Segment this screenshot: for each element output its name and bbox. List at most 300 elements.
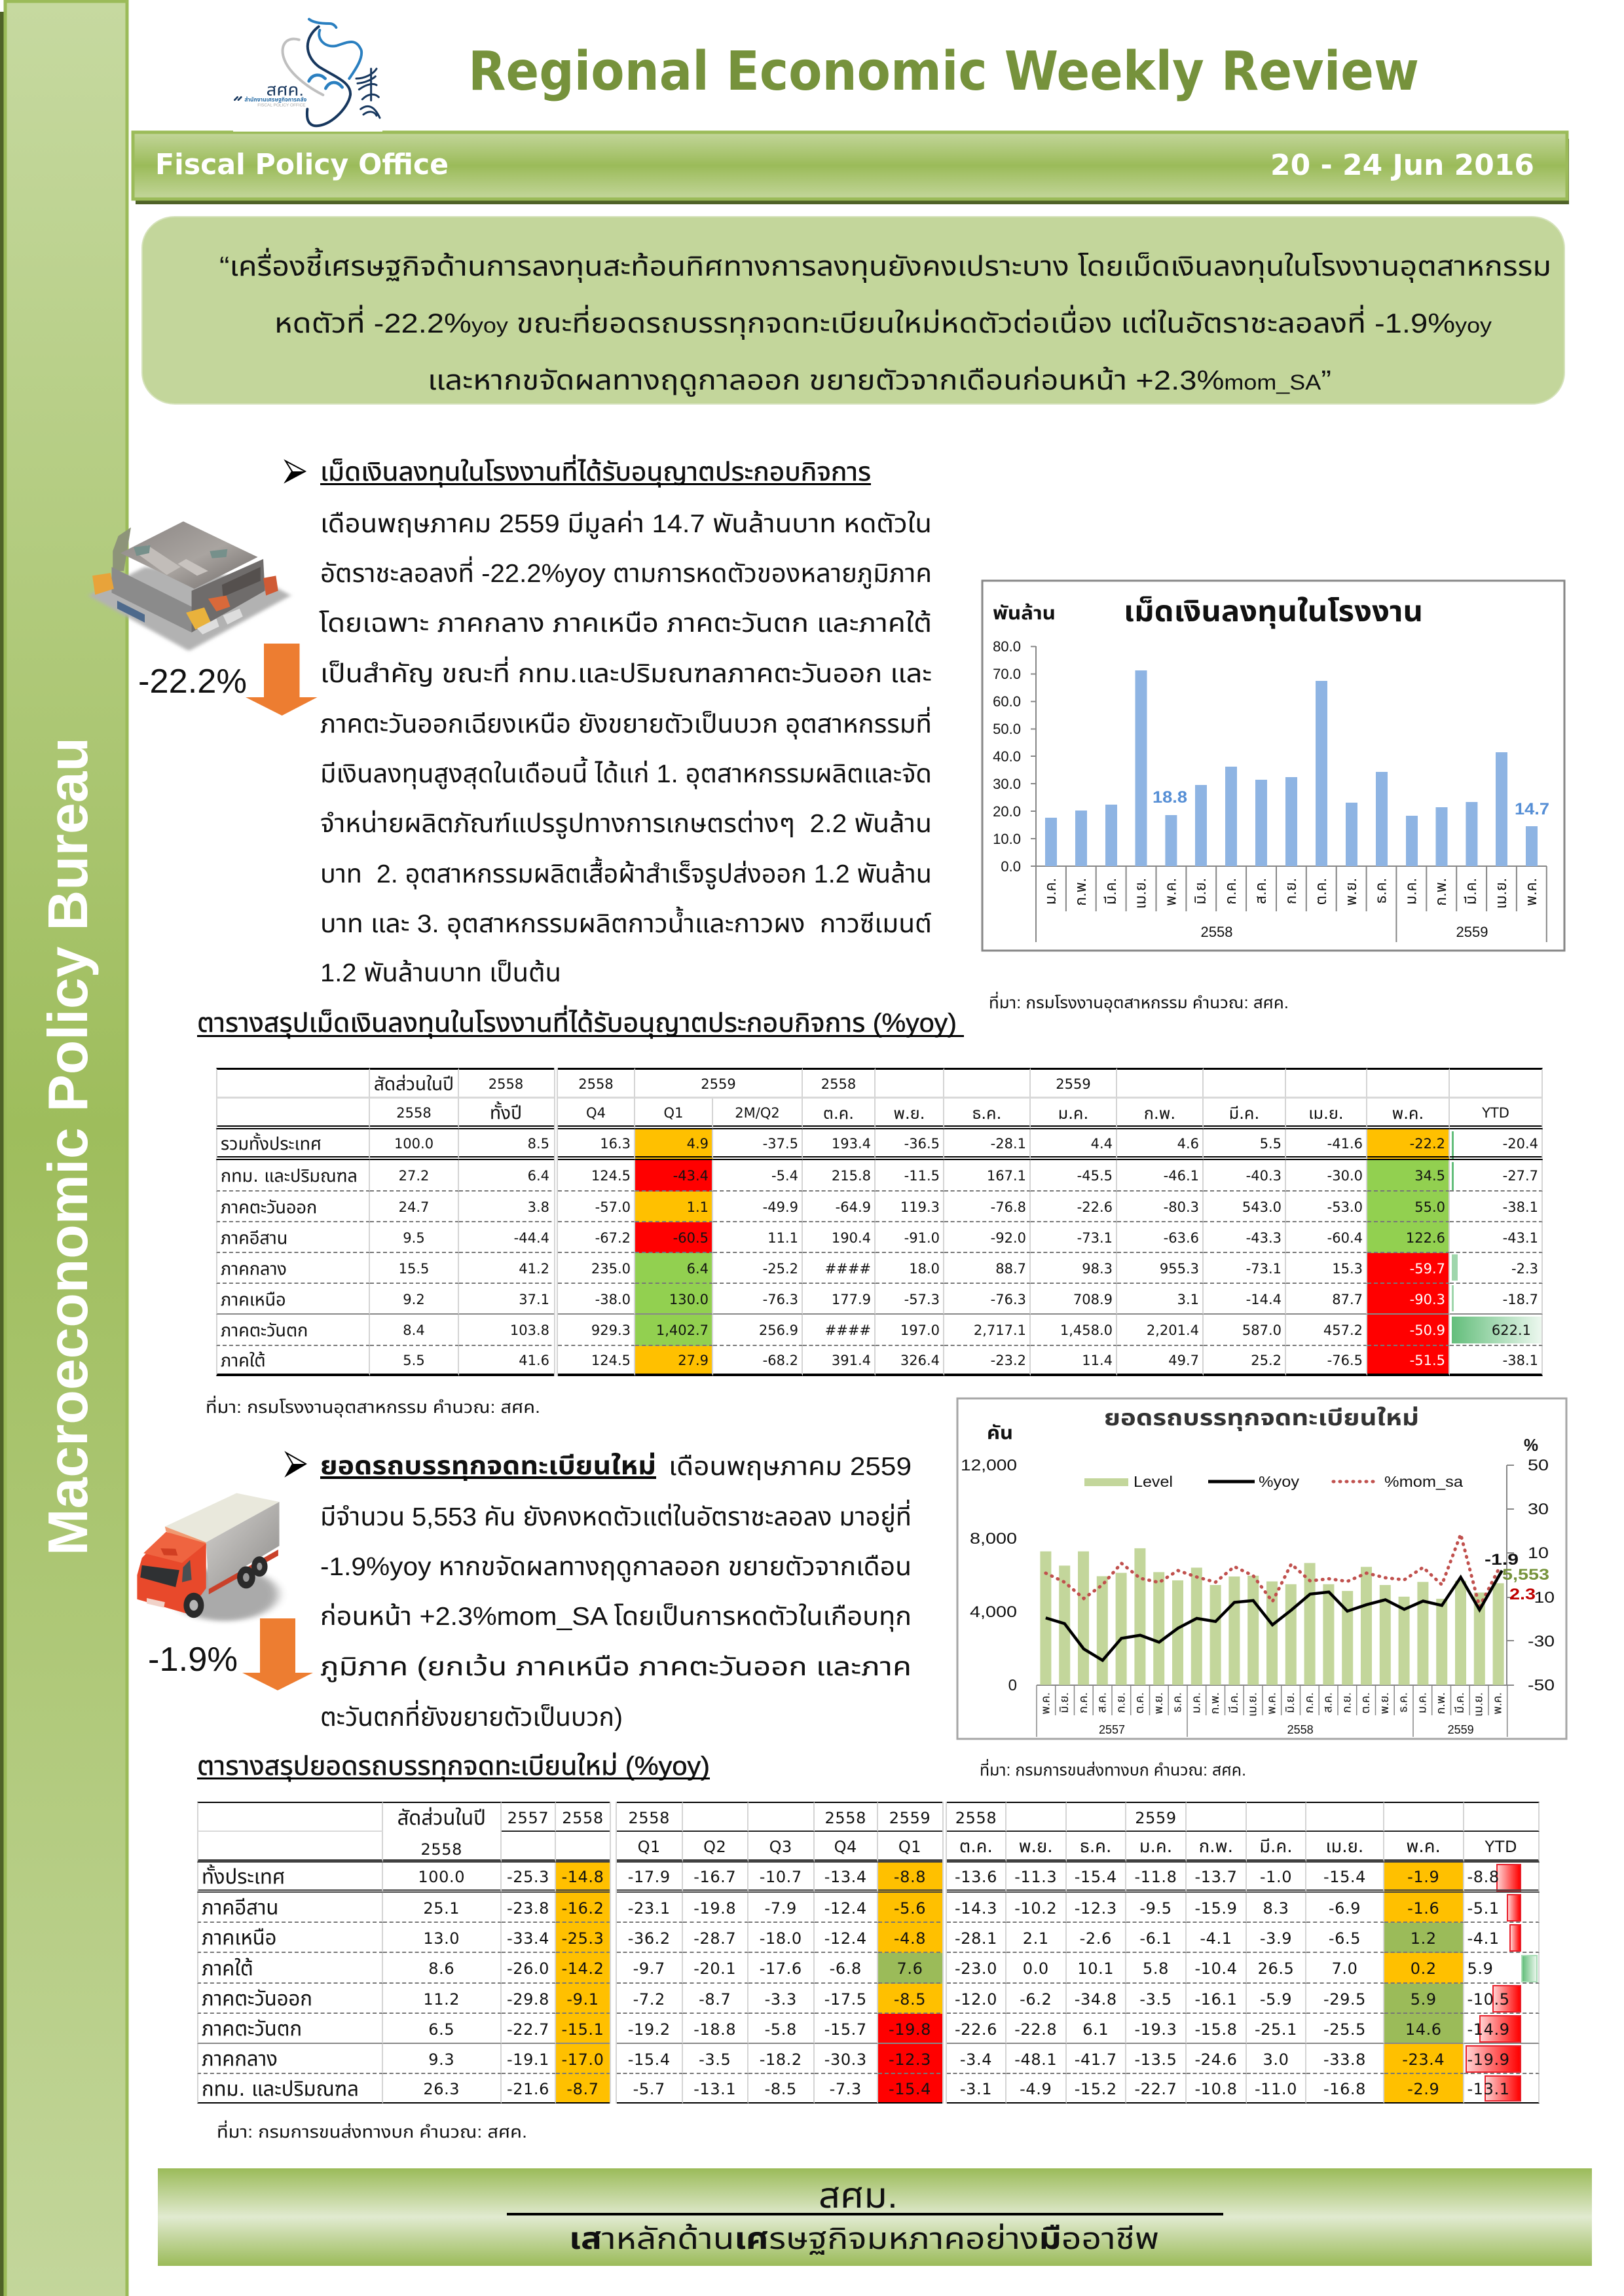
- table: truck registrations by region: 2559: [1135, 1808, 1177, 1827]
- table: factory investment by region: -57.3: [904, 1291, 940, 1307]
- table: factory investment by region: -22.6: [1077, 1199, 1113, 1215]
- change label: -1.9%: -1.9%: [148, 1641, 238, 1679]
- section 2 heading: ยอดรถบรรทุกจดทะเบียนใหม่: [320, 1452, 656, 1481]
- chart: factory investment: [982, 581, 1564, 951]
- section 1 body text: มีเงินลงทุนสูงสุดในเดือนนี้ ได้แก่ 1. อุตสาหกรรมผลิตและจัด: [320, 756, 932, 789]
- table: truck registrations by region: -11.8: [1134, 1868, 1177, 1886]
- section 1 body text: [319, 510, 932, 987]
- year labels: 2558: [1201, 924, 1232, 940]
- table: truck registrations by region: -10.7: [760, 1868, 802, 1886]
- table: factory investment by region: ภาคเหนือ: [221, 1290, 286, 1309]
- logo thai name: สำนักงานเศรษฐกิจการคลัง: [244, 96, 306, 103]
- table: truck registrations by region: -2.9: [1407, 2080, 1439, 2098]
- y axis: 0.0: [1001, 858, 1021, 875]
- table: factory investment by region: 177.9: [832, 1291, 871, 1307]
- table: truck registrations by region: -11.3: [1014, 1868, 1057, 1886]
- table: factory investment by region: 103.8: [510, 1322, 549, 1338]
- table: truck registrations by region: ก.พ.: [1199, 1836, 1233, 1857]
- table: factory investment by region: 55.0: [1414, 1199, 1445, 1215]
- table: factory investment by region: -23.2: [991, 1353, 1026, 1368]
- section 1 heading: เม็ดเงินลงทุนในโรงงานที่ได้รับอนุญาตประกอบกิจการ: [320, 454, 871, 487]
- table: factory investment by region: 235.0: [591, 1261, 631, 1277]
- table: truck registrations by region: -8.8: [1467, 1868, 1500, 1886]
- table: truck registrations by region: ภาคใต้: [202, 1956, 253, 1980]
- table: truck registrations by region: -29.5: [1323, 1990, 1366, 2009]
- x axis labels: พ.ค.: [1039, 1692, 1052, 1715]
- bullet arrow 2: [286, 1453, 306, 1476]
- table: truck registrations by region: กทม. และปริมณฑล: [202, 2077, 359, 2100]
- office name: Fiscal Policy Office: [155, 148, 449, 181]
- table: factory investment by region: ภาคใต้: [221, 1351, 266, 1371]
- table: factory investment by region: -90.3: [1410, 1291, 1445, 1307]
- table: factory investment by region: -80.3: [1164, 1199, 1199, 1215]
- table: truck registrations by region: -17.9: [628, 1868, 671, 1886]
- table: truck registrations by region: 2557: [507, 1808, 549, 1827]
- section 2 body text: ก่อนหน้า +2.3%mom_SA โดยเป็นการหดตัวในเกือบทุก: [320, 1603, 912, 1631]
- table: factory investment by region: 6.4: [687, 1261, 709, 1277]
- section 2 body text: [320, 1452, 912, 1732]
- table: truck registrations by region: -19.2: [628, 2020, 671, 2039]
- right axis: [1037, 1457, 1555, 1694]
- table: truck registrations by region: -15.8: [1194, 2020, 1238, 2039]
- table: factory investment by region: 5.5: [403, 1353, 425, 1368]
- table: truck registrations by region: 9.3: [428, 2050, 454, 2069]
- change label: -22.2%: -22.2%: [138, 663, 247, 701]
- section 1 body text: บาท 2. อุตสาหกรรมผลิตเสื้อผ้าสำเร็จรูปส่งออก 1.2 พันล้าน: [320, 856, 932, 889]
- table: truck registrations by region: -19.8: [889, 2020, 931, 2039]
- table: factory investment by region: 2,717.1: [974, 1322, 1026, 1338]
- x axis labels: ธ.ค.: [1373, 878, 1390, 903]
- section 1 body text: ภาคตะวันออกเฉียงเหนือ ยังขยายตัวเป็นบวก อุตสาหกรรมที่: [320, 706, 932, 739]
- x axis labels: พ.ย.: [1378, 1692, 1391, 1714]
- table: truck registrations by region: -3.4: [960, 2050, 992, 2069]
- table: truck registrations by region: -5.1: [1467, 1899, 1500, 1917]
- table: truck registrations by region: -24.6: [1194, 2050, 1238, 2069]
- table: truck registrations by region: -14.8: [561, 1868, 604, 1886]
- table: factory investment by region: 24.7: [399, 1199, 429, 1215]
- callout line 3: และหากขจัดผลทางฤดูกาลออก ขยายตัวจากเดือนก่อนหน้า +2.3% mom_SA ”: [428, 365, 1331, 397]
- year labels: [1099, 1723, 1474, 1736]
- table: factory investment by region: 391.4: [832, 1353, 871, 1368]
- level bars: [1040, 1548, 1504, 1685]
- table: truck registrations by region: -15.7: [824, 2020, 867, 2039]
- table: truck registrations by region: -16.1: [1194, 1990, 1238, 2009]
- table: factory investment by region: Q4: [586, 1105, 606, 1121]
- table: factory investment by region: 15.3: [1332, 1261, 1363, 1277]
- table: factory investment by region: 122.6: [1406, 1230, 1445, 1245]
- table: truck registrations by region: -19.8: [693, 1899, 736, 1917]
- table: truck registrations by region: -3.1: [960, 2080, 992, 2098]
- table: factory investment by region: พ.ค.: [1392, 1104, 1424, 1122]
- x axis labels: ม.ค.: [1415, 1692, 1428, 1713]
- table: truck registrations by region: -23.4: [1402, 2050, 1445, 2069]
- footer heading: สศม.: [819, 2176, 898, 2215]
- table: truck registrations by region: -19.3: [1134, 2020, 1177, 2039]
- table: truck registrations by region: 2558: [825, 1808, 866, 1827]
- table: truck registrations by region: -2.6: [1080, 1929, 1112, 1947]
- table: truck registrations by region: -13.4: [824, 1868, 867, 1886]
- table: truck registrations by region: ภาคตะวันออก: [202, 1987, 312, 2011]
- table: factory investment by region: -76.3: [763, 1291, 798, 1307]
- y axis: 80.0: [993, 638, 1021, 655]
- table: factory investment by region: ####: [825, 1322, 871, 1338]
- section 1 body text: 1.2 พันล้านบาท เป็นต้น: [320, 959, 561, 987]
- table: truck registrations by region: -5.8: [765, 2020, 797, 2039]
- table: factory investment by region: -41.6: [1327, 1135, 1363, 1151]
- left axis labels: 4,000: [970, 1603, 1017, 1621]
- table: truck registrations by region: -10.8: [1194, 2080, 1238, 2098]
- x axis labels: มิ.ย.: [1192, 878, 1209, 905]
- callout line 1: “เครื่องชี้เศรษฐกิจด้านการลงทุนสะท้อนทิศทางการลงทุนยังคงเปราะบาง โดยเม็ดเงินลงทุนในโรงงานอุตสาหกรรม: [219, 247, 1551, 283]
- table: factory investment by region: 2558: [578, 1076, 614, 1092]
- table: truck registrations by region: 2.1: [1023, 1929, 1049, 1947]
- table: factory investment by region: รวมทั้งประเทศ: [221, 1134, 322, 1154]
- table: truck registrations by region: มี.ค.: [1259, 1836, 1293, 1857]
- section 1 body text: โดยเฉพาะ ภาคกลาง ภาคเหนือ ภาคตะวันตก และภาคใต้: [319, 610, 932, 638]
- table: truck registrations by region: -20.1: [693, 1959, 736, 1978]
- table: truck registrations by region: -5.7: [633, 2080, 665, 2098]
- table: factory investment by region: 8.5: [528, 1135, 549, 1151]
- x axis labels: ก.พ.: [1432, 878, 1449, 906]
- table: factory investment by region: 41.6: [519, 1353, 549, 1368]
- logo english name: FISCAL POLICY OFFICE: [257, 103, 306, 108]
- table: factory investment by region: 9.2: [403, 1291, 425, 1307]
- year labels: [1201, 924, 1488, 940]
- table: factory investment by region: 2559: [1056, 1076, 1091, 1092]
- table: truck registrations by region: พ.ค.: [1406, 1836, 1441, 1857]
- table: truck registrations by region: ภาคกลาง: [202, 2047, 278, 2071]
- icon: truck: [137, 1493, 280, 1621]
- table: factory investment by region: -2.3: [1511, 1261, 1538, 1277]
- table: factory investment by region: -50.9: [1410, 1322, 1445, 1338]
- x axis labels: พ.ค.: [1162, 878, 1179, 906]
- table: factory investment by region: 27.2: [399, 1168, 429, 1184]
- table: factory investment by region: -67.2: [595, 1230, 631, 1245]
- table: factory investment by region: 27.9: [678, 1353, 709, 1368]
- right axis: -30: [1528, 1633, 1555, 1650]
- table: factory investment by region: -64.9: [836, 1199, 871, 1215]
- table: truck registrations by region: -4.9: [1020, 2080, 1052, 2098]
- table: truck registrations by region: -22.8: [1014, 2020, 1057, 2039]
- table: factory investment by region: -38.1: [1503, 1353, 1538, 1368]
- right axis: 30: [1528, 1501, 1549, 1518]
- x axis labels: ส.ค.: [1252, 878, 1269, 904]
- legend: Level: [1134, 1473, 1173, 1490]
- x axis labels: ธ.ค.: [1171, 1692, 1184, 1713]
- table: factory investment by region: -27.7: [1503, 1168, 1538, 1184]
- table: factory investment by region: 3.8: [528, 1199, 549, 1215]
- table: factory investment by region: 622.1: [1492, 1322, 1531, 1338]
- x axis labels: มี.ค.: [1462, 878, 1479, 905]
- section 1 body text: บาท และ 3. อุตสาหกรรมผลิตกาวน้ำและกาวผง กาวซีเมนต์: [320, 906, 932, 939]
- table: truck registrations by region: -15.1: [561, 2020, 604, 2039]
- table: truck registrations by region: -6.9: [1329, 1899, 1361, 1917]
- table: truck registrations by region: -13.6: [955, 1868, 997, 1886]
- summary callout: [142, 217, 1564, 404]
- table: truck registrations by region: -21.6: [507, 2080, 549, 2098]
- table: factory investment by region: 543.0: [1242, 1199, 1282, 1215]
- arrow: factory investment down: [246, 644, 317, 716]
- section 2 body text: ภูมิภาค (ยกเว้น ภาคเหนือ ภาคตะวันออก และภาค: [320, 1653, 912, 1682]
- table: truck registrations by region: 26.3: [423, 2080, 460, 2098]
- table: truck registrations by region: -3.3: [765, 1990, 797, 2009]
- x axis labels: มิ.ย.: [1058, 1692, 1071, 1713]
- table: factory investment by region: 8.4: [403, 1322, 425, 1338]
- x axis labels: ก.ย.: [1340, 1692, 1353, 1713]
- table: truck registrations by region: -15.9: [1194, 1899, 1238, 1917]
- section 1 body text: อัตราชะลอลงที่ -22.2%yoy ตามการหดตัวของหลายภูมิภาค: [320, 556, 932, 589]
- table: factory investment by region: 1,402.7: [656, 1322, 709, 1338]
- table: factory investment by region: 457.2: [1323, 1322, 1363, 1338]
- table: truck registrations by region: -13.1: [1467, 2080, 1510, 2098]
- table: truck registrations by region: 7.6: [897, 1959, 923, 1978]
- x axis labels: เม.ย.: [1246, 1692, 1259, 1717]
- table: truck registrations by region: -23.8: [507, 1899, 549, 1917]
- y axis: 40.0: [993, 748, 1021, 765]
- section 2 body text: -1.9%yoy หากขจัดผลทางฤดูกาลออก ขยายตัวจากเดือน: [320, 1553, 912, 1582]
- table: factory investment by region: พ.ย.: [893, 1104, 925, 1122]
- table: truck registrations by region: เม.ย.: [1326, 1836, 1363, 1857]
- left axis labels: 12,000: [961, 1457, 1017, 1474]
- table: truck registrations by region: -15.4: [1323, 1868, 1366, 1886]
- table: truck registrations by region: -18.2: [760, 2050, 802, 2069]
- table 1 source: ที่มา: กรมโรงงานอุตสาหกรรม คำนวณ: สศค.: [206, 1395, 540, 1417]
- table: truck registrations by region: -4.1: [1200, 1929, 1232, 1947]
- table: truck registrations by region: -12.3: [889, 2050, 931, 2069]
- table: truck registrations by region: -10.4: [1194, 1959, 1238, 1978]
- table: factory investment by region: -25.2: [763, 1261, 798, 1277]
- section 1 body text: เดือนพฤษภาคม 2559 มีมูลค่า 14.7 พันล้านบาท หดตัวใน: [320, 510, 932, 539]
- table: factory investment by region: 124.5: [591, 1353, 631, 1368]
- table: truck registrations by region: YTD: [1485, 1837, 1517, 1855]
- table: truck registrations by region: -28.7: [693, 1929, 736, 1947]
- left axis labels: [961, 1457, 1017, 1694]
- table: truck registrations by region: -3.9: [1260, 1929, 1292, 1947]
- table: truck registrations by region: -34.8: [1075, 1990, 1117, 2009]
- table: truck registrations by region: -15.4: [889, 2080, 931, 2098]
- table: truck registrations by region: 10.1: [1077, 1959, 1114, 1978]
- x axis labels: ก.พ.: [1072, 878, 1089, 906]
- table: factory investment by region: -76.3: [991, 1291, 1026, 1307]
- year labels: 2559: [1448, 1723, 1474, 1736]
- legend: [1084, 1473, 1463, 1490]
- table: truck registrations by region: ทั้งประเทศ: [202, 1865, 285, 1888]
- table: truck registrations by region: -15.2: [1075, 2080, 1117, 2098]
- table: factory investment by region: 5.5: [1260, 1135, 1282, 1151]
- left sidebar: [0, 1, 127, 2296]
- table: factory investment by region: -11.5: [904, 1168, 940, 1184]
- table: truck registrations by region: -25.1: [1255, 2020, 1297, 2039]
- value labels: 2.3: [1509, 1586, 1536, 1603]
- table 2 source: ที่มา: กรมการขนส่งทางบก คำนวณ: สศค.: [217, 2120, 527, 2141]
- chart title: เม็ดเงินลงทุนในโรงงาน: [1124, 596, 1423, 629]
- chart title: ยอดรถบรรทุกจดทะเบียนใหม่: [1104, 1406, 1419, 1431]
- table: truck registrations by region: -12.4: [824, 1899, 867, 1917]
- table: factory investment by region: 326.4: [900, 1353, 940, 1368]
- table: factory investment by region: 11.4: [1082, 1353, 1113, 1368]
- x axis labels: เม.ย.: [1492, 878, 1509, 909]
- table: factory investment by region: 119.3: [900, 1199, 940, 1215]
- table: truck registrations by region: -15.4: [1075, 1868, 1117, 1886]
- table: truck registrations by region: -17.6: [760, 1959, 802, 1978]
- year labels: 2558: [1287, 1723, 1314, 1736]
- table: truck registrations by region: -8.7: [699, 1990, 731, 2009]
- table: truck registrations by region: 2559: [889, 1808, 931, 1827]
- table: factory investment by region: 16.3: [600, 1135, 631, 1151]
- x axis labels: [1037, 1685, 1507, 1737]
- table: factory investment by region: ก.พ.: [1144, 1104, 1175, 1122]
- x axis labels: มิ.ย.: [1283, 1692, 1297, 1713]
- table: truck registrations by region: -16.7: [693, 1868, 736, 1886]
- right unit: %: [1524, 1435, 1538, 1455]
- table: truck registrations by region: -26.0: [507, 1959, 549, 1978]
- table: truck registrations by region: -7.2: [633, 1990, 665, 2009]
- table: truck registrations by region: -16.2: [561, 1899, 604, 1917]
- table: truck registrations by region: -11.0: [1255, 2080, 1297, 2098]
- x axis labels: ก.ค.: [1302, 1692, 1316, 1713]
- x axis labels: ส.ค.: [1096, 1692, 1109, 1713]
- table: truck registrations by region: -19.1: [507, 2050, 549, 2069]
- table: truck registrations by region: -4.1: [1467, 1929, 1500, 1947]
- table: factory investment by region: 87.7: [1332, 1291, 1363, 1307]
- table: truck registrations by region: ภาคอีสาน: [202, 1896, 278, 1920]
- table: truck registrations by region: -14.9: [1467, 2020, 1510, 2039]
- table: truck registrations by region: -6.2: [1020, 1990, 1052, 2009]
- logo wordmark: สศค.: [267, 82, 304, 100]
- value label 14.7: 14.7: [1515, 800, 1549, 818]
- table: truck registrations by region: ภาคเหนือ: [202, 1926, 276, 1950]
- table: truck registrations by region: 14.6: [1405, 2020, 1442, 2039]
- table: truck registrations by region: -15.4: [628, 2050, 671, 2069]
- table: factory investment by region: 100.0: [394, 1135, 434, 1151]
- table: factory investment by region: เม.ย.: [1308, 1104, 1344, 1122]
- sidebar title: Macroeconomic Policy Bureau: [37, 737, 100, 1556]
- x axis labels: พ.ย.: [1152, 1692, 1165, 1714]
- x axis labels: พ.ย.: [1342, 878, 1359, 905]
- section 2 body text: เดือนพฤษภาคม 2559: [669, 1453, 912, 1481]
- table: truck registrations by region: 5.9: [1467, 1959, 1493, 1978]
- table: truck registrations by region: -29.8: [507, 1990, 549, 2009]
- section 2 body text: ตะวันตกที่ยังขยายตัวเป็นบวก): [320, 1700, 623, 1732]
- table: factory investment by region: -59.7: [1410, 1261, 1445, 1277]
- table: truck registrations by region: -28.1: [955, 1929, 997, 1947]
- table: truck registrations by region: -18.8: [693, 2020, 736, 2039]
- table: factory investment by region: 256.9: [759, 1322, 798, 1338]
- legend: %yoy: [1259, 1473, 1300, 1490]
- table: factory investment by region: 37.1: [519, 1291, 549, 1307]
- table: factory investment by region: -38.1: [1503, 1199, 1538, 1215]
- table: truck registrations by region: -9.5: [1139, 1899, 1172, 1917]
- table: truck registrations by region: -13.1: [693, 2080, 736, 2098]
- x axis labels: ม.ค.: [1042, 878, 1059, 905]
- value labels: 5,553: [1502, 1566, 1549, 1584]
- x axis labels: ก.ย.: [1282, 878, 1299, 904]
- table: factory investment by region: -44.4: [514, 1230, 549, 1245]
- table: truck registrations by region: -6.1: [1139, 1929, 1172, 1947]
- table: factory investment by region: 3.1: [1177, 1291, 1199, 1307]
- table: factory investment by region: -30.0: [1327, 1168, 1363, 1184]
- table: truck registrations by region: -3.5: [1139, 1990, 1172, 2009]
- table: truck registrations by region: 7.0: [1332, 1959, 1357, 1978]
- table: factory investment by region: 1,458.0: [1060, 1322, 1113, 1338]
- table 2 title: ตารางสรุปยอดรถบรรทุกจดทะเบียนใหม่ (%yoy): [197, 1752, 710, 1781]
- table: factory investment by region: 15.5: [399, 1261, 429, 1277]
- table: truck registrations by region: -9.1: [566, 1990, 599, 2009]
- table: factory investment by region: -38.0: [595, 1291, 631, 1307]
- table: truck registrations by region: 2558: [562, 1808, 604, 1827]
- table: factory investment by region: -18.7: [1503, 1291, 1538, 1307]
- table: factory investment by region: -5.4: [771, 1168, 798, 1184]
- table: truck registrations by region: Q1: [638, 1837, 661, 1855]
- table: truck registrations by region: -17.0: [561, 2050, 604, 2069]
- x axis labels: ส.ค.: [1321, 1692, 1335, 1713]
- x axis labels: ธ.ค.: [1397, 1692, 1410, 1713]
- table: factory investment by region: -51.5: [1410, 1353, 1445, 1368]
- table: truck registrations by region: 5.8: [1143, 1959, 1169, 1978]
- table: factory investment by region: -43.4: [673, 1168, 709, 1184]
- table: factory investment by region: 9.5: [403, 1230, 425, 1245]
- right axis: -50: [1528, 1677, 1555, 1694]
- table: truck registrations by region: Q1: [898, 1837, 921, 1855]
- table: truck registrations by region: -19.9: [1467, 2050, 1510, 2069]
- y axis: 70.0: [993, 666, 1021, 682]
- table: truck registrations by region: -14.2: [561, 1959, 604, 1978]
- table: factory investment by region: ทั้งปี: [490, 1102, 522, 1123]
- table: truck registrations by region: -7.3: [830, 2080, 862, 2098]
- x axis labels: พ.ค.: [1490, 1692, 1504, 1715]
- table: factory investment by region: ธ.ค.: [972, 1104, 1001, 1122]
- table: factory investment by region: -76.5: [1327, 1353, 1363, 1368]
- footer banner: [158, 2168, 1592, 2266]
- table: truck registrations by region: -41.7: [1075, 2050, 1117, 2069]
- table: truck registrations by region: -1.9: [1407, 1868, 1439, 1886]
- table: factory investment by region: Q1: [664, 1105, 683, 1121]
- header band: office and date: [133, 132, 1569, 204]
- chart unit: พันล้าน: [993, 603, 1056, 623]
- table: factory investment by region: -49.9: [763, 1199, 798, 1215]
- table: factory investment by region: -60.5: [673, 1230, 709, 1245]
- table: factory investment by region: 2M/Q2: [735, 1105, 780, 1121]
- table: truck registrations by region: พ.ย.: [1019, 1836, 1053, 1857]
- table: truck registrations by region: 0.0: [1023, 1959, 1049, 1978]
- table: truck registrations by region: 6.1: [1082, 2020, 1109, 2039]
- table: truck registrations by region: -10.5: [1467, 1990, 1510, 2009]
- icon: factory: [88, 521, 291, 651]
- table: truck registrations by region: 8.3: [1263, 1899, 1289, 1917]
- x axis labels: ก.ย.: [1114, 1692, 1127, 1713]
- right axis: -10: [1528, 1589, 1555, 1607]
- table: truck registrations by region: -1.6: [1407, 1899, 1439, 1917]
- table: factory investment by region: 4.9: [687, 1135, 709, 1151]
- table: truck registrations by region: -18.0: [760, 1929, 802, 1947]
- table: truck registrations by region: -13.5: [1134, 2050, 1177, 2069]
- table: truck registrations by region: -8.5: [894, 1990, 926, 2009]
- x axis labels: ต.ค.: [1312, 878, 1329, 905]
- table: factory investment by region: 130.0: [669, 1291, 709, 1307]
- table: truck registrations by region: -12.4: [824, 1929, 867, 1947]
- table: truck registrations by region: -30.3: [824, 2050, 867, 2069]
- logo: [233, 0, 382, 132]
- table: truck registrations by region: -6.5: [1329, 1929, 1361, 1947]
- table: truck registrations by region: 8.6: [428, 1959, 454, 1978]
- table: factory investment by region: ภาคกลาง: [221, 1258, 287, 1279]
- bars: [1045, 670, 1538, 866]
- table: factory investment by region: 2559: [701, 1076, 736, 1092]
- table: factory investment by region: -60.4: [1327, 1230, 1363, 1245]
- table: factory investment by region: 2558: [489, 1076, 523, 1092]
- x axis labels: ม.ค.: [1189, 1692, 1202, 1713]
- year labels: 2557: [1099, 1723, 1125, 1736]
